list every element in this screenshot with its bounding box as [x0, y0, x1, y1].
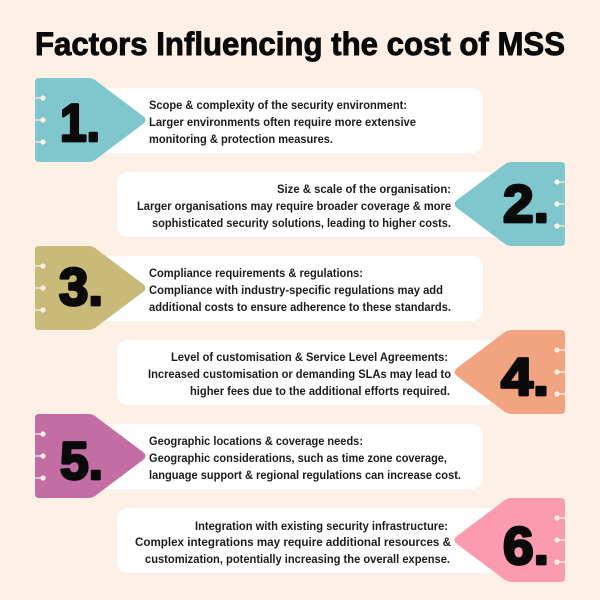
tag 5 [35, 414, 146, 498]
tag 1 [35, 78, 146, 162]
tag 2 [454, 162, 565, 246]
text bar 4 [117, 340, 510, 405]
text block 3: additional costs to ensure adherence to these standards. [149, 301, 451, 314]
number 4: 4. [501, 348, 549, 407]
text block 4 [148, 351, 451, 398]
text block 5: Geographic locations & coverage needs: [149, 435, 363, 448]
text block 6: customization, potentially increasing the overall expense. [145, 553, 450, 566]
panel: factor 1 [35, 78, 483, 162]
text block 6: Integration with existing security infrastructure: [195, 520, 448, 533]
panel: factor 4 [117, 330, 565, 414]
text block 5: Geographic considerations, such as time zone coverage, [149, 452, 447, 465]
text block 4: Level of customisation & Service Level Agreements: [171, 351, 448, 364]
panel: factor 3 [35, 246, 483, 330]
panel: factor 5 [35, 414, 483, 498]
text bar 3 [90, 256, 483, 321]
text block 2: Size & scale of the organisation: [277, 183, 451, 196]
text block 6 [135, 520, 452, 566]
text block 1: Larger environments often require more extensive [149, 116, 417, 129]
panel: factor 6 [117, 498, 565, 582]
tag 6 [454, 498, 565, 582]
text bar 6 [117, 508, 510, 573]
text block 3: Compliance with industry-specific regulations may add [149, 284, 443, 297]
text block 3 [149, 267, 451, 314]
text block 1: Scope & complexity of the security environment: [149, 99, 407, 112]
text block 6: Complex integrations may require additional resources & [135, 536, 452, 549]
number 3: 3. [59, 258, 103, 317]
tag 4 [454, 330, 565, 414]
title: Factors Influencing the cost of MSS [35, 26, 565, 62]
number 5: 5. [60, 432, 103, 491]
text block 3: Compliance requirements & regulations: [149, 267, 363, 280]
text block 2 [137, 183, 452, 230]
tag 3 [35, 246, 146, 330]
text block 2: Larger organisations may require broader coverage & more [137, 200, 452, 213]
text block 4: higher fees due to the additional efforts required. [190, 385, 450, 398]
text block 5 [149, 435, 461, 482]
number 6: 6. [503, 517, 549, 576]
text block 1: monitoring & protection measures. [149, 133, 333, 146]
text block 2: sophisticated security solutions, leading to higher costs. [152, 217, 451, 230]
number 1: 1. [60, 94, 100, 153]
text block 5: language support & regional regulations can increase cost. [149, 469, 461, 482]
text bar 1 [90, 88, 483, 153]
text block 1 [149, 99, 417, 146]
text bar 5 [90, 424, 483, 489]
text block 4: Increased customisation or demanding SLAs may lead to [148, 368, 451, 381]
panel: factor 2 [117, 162, 565, 246]
number 2: 2. [503, 175, 549, 234]
text bar 2 [117, 172, 510, 237]
